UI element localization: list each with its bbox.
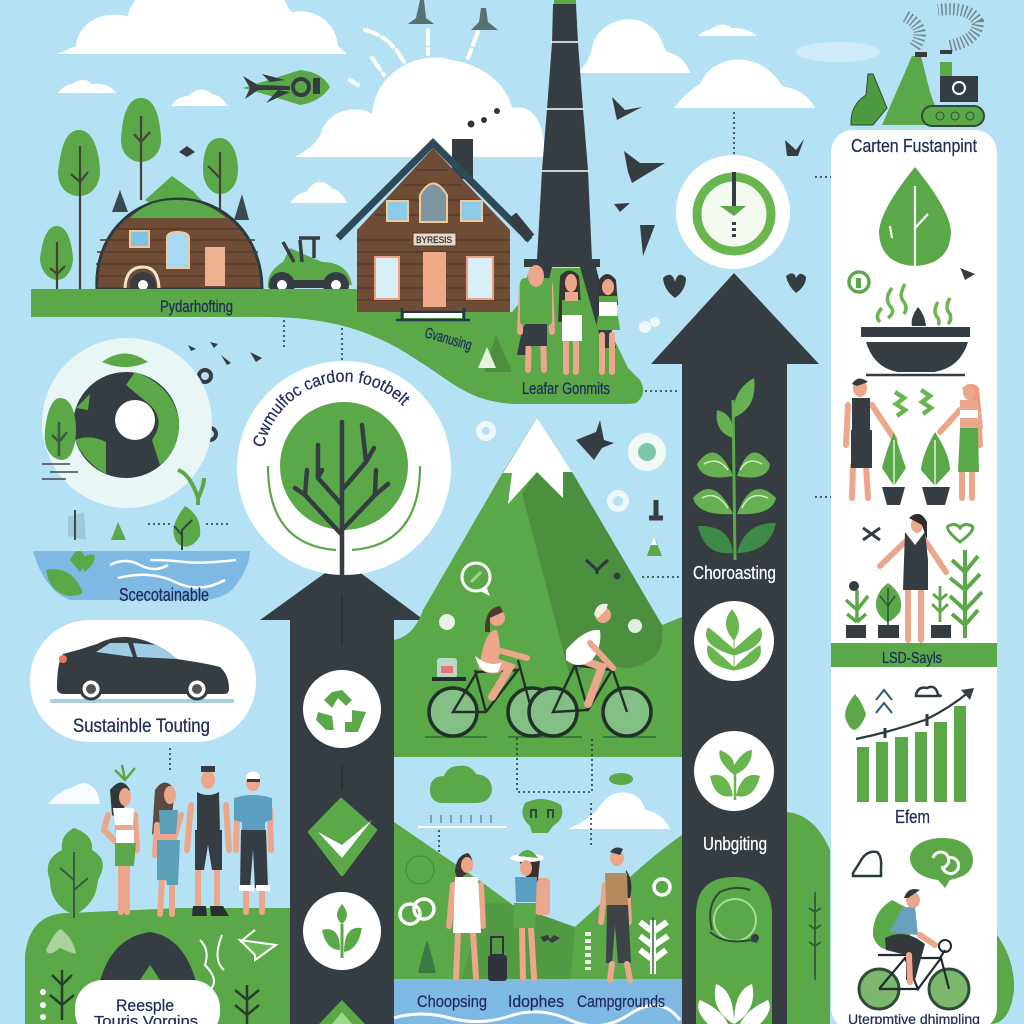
house sign: BYRESIS — [416, 235, 452, 245]
label: Gvanusing: Gvanusing — [423, 325, 474, 354]
label: Choroasting: Choroasting — [693, 563, 776, 583]
person: woman in black dress — [880, 514, 946, 640]
person: man with plants — [846, 378, 895, 498]
right arrow — [651, 273, 819, 1024]
panel: bottom left ground — [25, 783, 290, 1024]
bike: second cyclist — [529, 604, 651, 736]
labels: Choopsing, Idophes, Campgrounds: Idophes — [508, 992, 564, 1011]
panel: right white column — [831, 130, 997, 1024]
person: woman with sun hat — [510, 850, 550, 978]
icon: leaf circle — [694, 601, 774, 681]
icons: potted plants row — [846, 524, 982, 638]
person: man with backpack — [601, 848, 631, 980]
icon: sprout circle — [303, 892, 381, 970]
person: woman green skirt — [596, 274, 620, 372]
bike: first cyclist — [425, 606, 656, 737]
lower valley scene — [394, 738, 682, 1024]
icon: arrows and potted plants — [882, 390, 950, 505]
mountain scene with cyclists — [394, 418, 682, 757]
person: woman white shorts — [558, 270, 582, 372]
person: cyclist with backpack — [859, 889, 969, 1009]
people: tourists group — [104, 765, 272, 916]
connector dashes — [148, 112, 835, 772]
person: woman with leaf headdress — [104, 765, 137, 912]
person: older man blue tee — [234, 772, 272, 912]
sprout leaf with dashes — [68, 506, 200, 550]
icon: bottom green diamond — [319, 1000, 365, 1024]
label: Sustainble Touting: Sustainble Touting — [73, 716, 210, 737]
icon: cap and speech bubble — [853, 838, 973, 888]
label: Carten Fustanpint: Carten Fustanpint — [851, 136, 977, 156]
icon: sun rays and small planes — [350, 0, 500, 128]
label: Efem: Efem — [895, 807, 930, 827]
label: Unbgiting: Unbgiting — [703, 834, 767, 854]
vehicle: green cart — [268, 238, 352, 298]
globe: planet in bubble — [42, 338, 212, 508]
white circle: cumulative carbon footprint: Cwmulfoc cardon footbelt — [254, 370, 410, 446]
water — [394, 979, 682, 1024]
person: woman with plants — [940, 384, 983, 498]
person: man in black tank — [187, 766, 229, 916]
icon: green check diamond — [310, 800, 375, 874]
green blob behind right panel — [787, 812, 1014, 1024]
icon: steaming bowl — [861, 284, 970, 375]
central arrow — [260, 560, 424, 1024]
icon: ring and small bird — [849, 268, 975, 292]
bar chart: rising emissions savings — [845, 687, 974, 802]
label: Scecotainable: Scecotainable — [119, 585, 209, 605]
house: wooden chalet — [338, 139, 530, 320]
icon: recycle circle — [303, 670, 381, 748]
person: woman in white — [449, 853, 483, 978]
factory: top icons — [851, 9, 984, 126]
decorative cluster: dots and gear — [476, 317, 666, 518]
band: LSD-Sayls: LSD-Sayls — [882, 650, 942, 667]
house sign — [413, 233, 456, 246]
arrow markers: small bird icons — [168, 97, 806, 460]
white circle: cumulative carbon footprint — [237, 361, 451, 575]
green pill with loop and leaf — [696, 877, 772, 1024]
icon: sprout circle 2 — [694, 731, 774, 811]
person: man green shirt — [520, 265, 552, 370]
people: group at tower — [520, 265, 620, 372]
clouds: sky — [57, 0, 880, 203]
label: Pydarhofting: Pydarhofting — [160, 297, 233, 316]
panel: water with leaves — [33, 551, 250, 600]
icons on central arrow — [303, 670, 381, 1024]
small plant stem on blob — [809, 892, 821, 980]
band: LSD-Sayls — [831, 643, 997, 667]
plant on right arrow — [693, 378, 776, 560]
labels: Choopsing, Idophes, Campgrounds: Campgrounds — [577, 992, 665, 1011]
tower: black lattice — [512, 0, 616, 355]
suitcase — [488, 937, 507, 981]
panel: car pill — [30, 620, 256, 742]
label: Reesple Touris Vorgins — [94, 996, 198, 1024]
ground: hillside strip — [31, 268, 643, 404]
icon: green plane — [243, 70, 330, 105]
caravan: wooden dome cabin — [96, 176, 262, 298]
label: Leafar Gonmits: Leafar Gonmits — [522, 379, 610, 398]
icon: leaf drop — [879, 167, 951, 266]
dashed connectors in valley — [439, 738, 592, 852]
icon: speech bubble — [462, 563, 490, 596]
person: woman in teal — [152, 782, 181, 914]
labels: Choopsing, Idophes, Campgrounds — [417, 992, 665, 1011]
label: Reesple Touris Vorgins: Reesple — [116, 996, 174, 1015]
icon: small pine — [478, 335, 512, 372]
trees: left grove — [40, 98, 249, 289]
white circle with gauge — [676, 155, 790, 269]
labels: Choopsing, Idophes, Campgrounds: Choopsing — [417, 992, 487, 1011]
